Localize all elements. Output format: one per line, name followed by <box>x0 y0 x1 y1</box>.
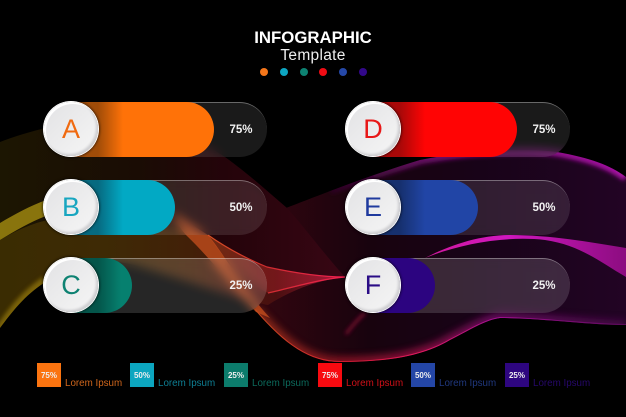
left dim sheet <box>0 120 345 277</box>
fill C <box>71 258 132 313</box>
icon: circle F: F <box>365 270 381 300</box>
track F <box>346 258 570 313</box>
legend item B <box>130 363 215 389</box>
magenta ribbon <box>425 235 626 277</box>
lower yellow-brown sheet <box>0 217 345 328</box>
value E: 50% <box>532 202 556 214</box>
bright yellow band <box>0 200 46 240</box>
icon: circle B: B <box>62 192 80 222</box>
legend item D <box>318 363 403 389</box>
panel: bar E <box>60 69 570 236</box>
legend item A <box>37 363 122 389</box>
legend item F: 25% <box>509 371 525 380</box>
panel: bar F <box>340 69 570 314</box>
legend item B: 50% <box>134 371 150 380</box>
subtitle: Template <box>280 47 346 64</box>
icon: circle D <box>346 102 400 156</box>
icon: circle D: D <box>363 114 383 144</box>
icon: circle A <box>44 102 98 156</box>
panel: bar A <box>42 101 267 158</box>
value B: 50% <box>229 202 253 214</box>
icon: circle E: E <box>364 192 382 222</box>
legend item F <box>505 363 590 389</box>
fill A <box>71 102 214 157</box>
right dark sheet <box>255 150 626 362</box>
icon: circle E <box>346 180 400 234</box>
fill D <box>373 102 517 157</box>
track D <box>346 102 570 157</box>
legend item C <box>224 258 418 389</box>
legend item D: 75% <box>322 371 338 380</box>
panel: bar B <box>40 178 267 236</box>
value C: 25% <box>229 280 253 292</box>
icon: circle B <box>44 180 98 234</box>
panel: bar C <box>41 256 267 313</box>
legend item A: 75% <box>41 371 57 380</box>
panel: bar D <box>340 69 570 157</box>
legend item C: 25% <box>228 371 244 380</box>
icon: circle C: C <box>61 270 81 300</box>
value A: 75% <box>229 124 253 136</box>
legend item C: Lorem Ipsum <box>252 378 309 389</box>
legend item E <box>411 363 496 389</box>
track E <box>346 180 570 235</box>
track A <box>44 102 267 157</box>
icon: circle F <box>346 258 400 312</box>
value D: 75% <box>532 124 556 136</box>
fill B <box>71 180 175 235</box>
track C <box>44 258 267 313</box>
icon: circle A: A <box>62 114 80 144</box>
legend item B: Lorem Ipsum <box>158 378 215 389</box>
orange ribbon <box>172 212 270 318</box>
title: INFOGRAPHIC <box>254 28 372 47</box>
value F: 25% <box>532 280 556 292</box>
legend item D: Lorem Ipsum <box>346 378 403 389</box>
yellow lower sweep <box>0 281 46 330</box>
fill E <box>373 180 478 235</box>
icon: circle C <box>44 258 98 312</box>
legend item E: Lorem Ipsum <box>439 378 496 389</box>
legend dots <box>260 68 367 76</box>
red fan to pinch point <box>208 235 345 293</box>
right sheet rims <box>255 150 626 362</box>
legend item F: Lorem Ipsum <box>533 378 590 389</box>
red spike <box>346 313 365 334</box>
legend item E: 50% <box>415 371 431 380</box>
bright fan lines <box>208 235 345 293</box>
fill F <box>373 258 435 313</box>
track B <box>44 180 267 235</box>
legend item A: Lorem Ipsum <box>65 378 122 389</box>
background wave ribbons <box>0 128 626 362</box>
